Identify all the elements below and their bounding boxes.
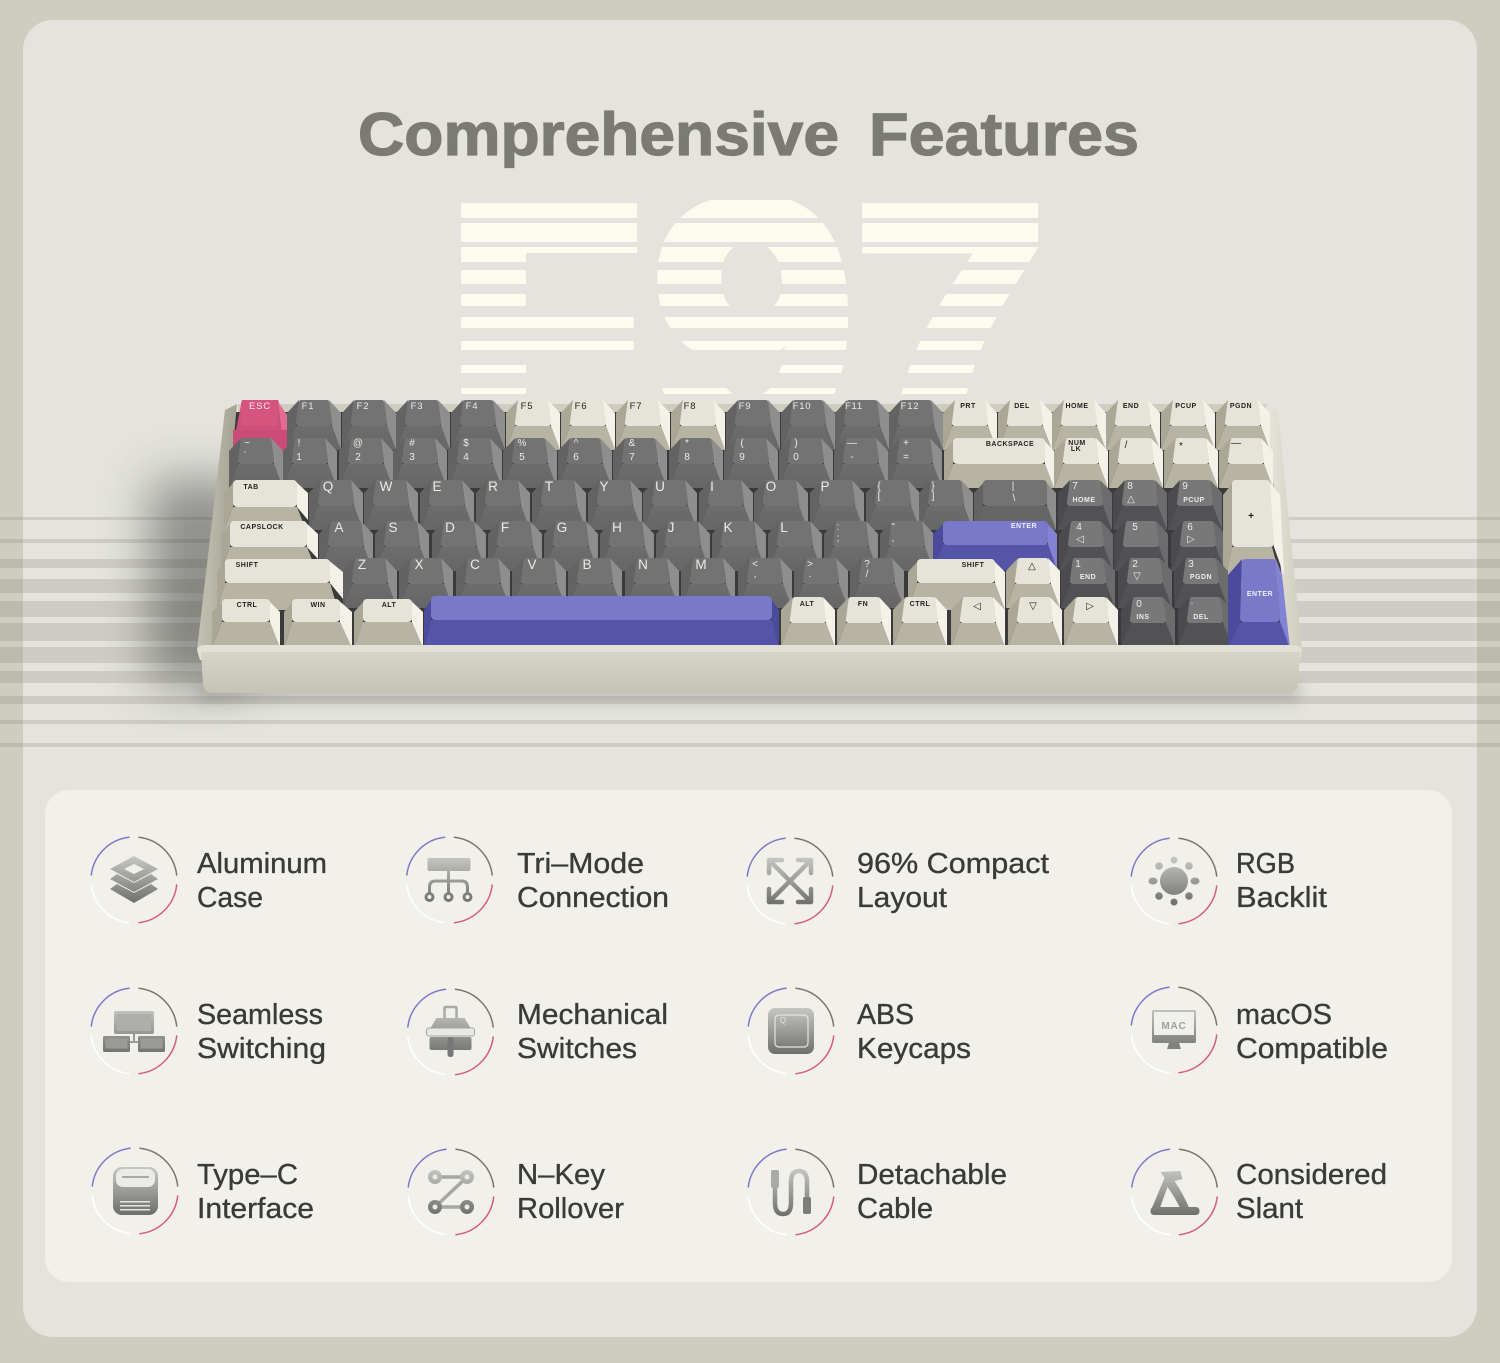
key row: function keys: F7	[630, 401, 642, 412]
icon: MAC monitor	[1152, 1010, 1196, 1049]
key row: QWERTY: 7	[1072, 481, 1078, 492]
key row: numbers: 1	[296, 452, 302, 463]
key row: QWERTY: PCUP	[1183, 497, 1205, 504]
key row: QWERTY: TAB	[243, 484, 259, 491]
key row: shift row: Z	[358, 557, 366, 572]
label: Switching	[197, 1033, 326, 1065]
icon: keycap: Q	[780, 1016, 786, 1025]
key row: numbers: )	[794, 438, 798, 449]
key row: bottom row: CTRL	[910, 601, 931, 608]
striped model name F97	[461, 200, 1038, 394]
stage stripes behind keyboard	[0, 517, 1500, 747]
key row: function keys: F6	[575, 401, 587, 412]
label	[857, 848, 1049, 914]
key row: home row: ;	[837, 533, 839, 544]
key row: numbers: 4	[463, 452, 469, 463]
key row: home row: 4	[1076, 522, 1082, 533]
feature: Aluminum Case	[91, 837, 327, 923]
feature: RGB Backlit	[1131, 838, 1327, 924]
icon: keycap	[768, 1008, 814, 1054]
key row: function keys: HOME	[1066, 403, 1088, 410]
key row: shift row: △	[1028, 561, 1036, 572]
tall plus key	[1223, 480, 1284, 590]
key row: shift row	[217, 557, 1228, 610]
striped model name F97: 9	[651, 130, 855, 509]
keyboard front edge	[197, 645, 1302, 693]
key row: home row: H	[612, 520, 622, 535]
key row: shift row: ,	[754, 569, 756, 580]
key row: QWERTY: 9	[1182, 481, 1188, 492]
label	[1236, 999, 1388, 1065]
key row: QWERTY: Q	[323, 479, 333, 494]
key row: bottom row: DEL	[1193, 614, 1209, 621]
feature: Considered Slant	[1132, 1149, 1387, 1235]
key row: function keys: DEL	[1014, 403, 1030, 410]
label: macOS	[1236, 999, 1332, 1031]
title: Features	[869, 101, 1139, 168]
key row: QWERTY	[224, 479, 1222, 530]
label: Detachable	[857, 1159, 1007, 1191]
key row: numbers: LK	[1071, 446, 1081, 453]
key row: bottom row: ▷	[1086, 601, 1094, 612]
key row: QWERTY: ]	[932, 491, 935, 502]
key row: function keys	[233, 400, 1270, 455]
key row: function keys: PCUP	[1175, 403, 1197, 410]
key row: numbers	[229, 438, 1273, 488]
key row: bottom row: .	[1191, 596, 1193, 607]
key row: shift row: END	[1080, 574, 1096, 581]
key row: bottom row: ALT	[382, 602, 397, 609]
label	[517, 1159, 624, 1225]
label	[197, 1159, 314, 1225]
key row: numbers: NUM	[1068, 440, 1086, 447]
key row: numbers: %	[518, 438, 527, 449]
icon: layers	[110, 856, 158, 903]
label: Seamless	[197, 999, 323, 1031]
label	[1236, 848, 1327, 914]
key row: QWERTY: △	[1127, 494, 1135, 505]
key row: function keys: PRT	[960, 403, 976, 410]
title	[358, 101, 1139, 168]
icon: nodes	[428, 1170, 474, 1214]
key row: shift row: ▽	[1133, 571, 1141, 582]
key row: function keys: F11	[845, 401, 863, 412]
icon: expand arrows	[769, 860, 811, 902]
key row: bottom row: INS	[1136, 614, 1150, 621]
key row: home row: K	[723, 520, 733, 535]
key row: shift row: 3	[1188, 559, 1194, 570]
key row: numbers: 8	[684, 452, 690, 463]
key row: function keys: END	[1123, 403, 1139, 410]
key row: numbers: 3	[409, 452, 415, 463]
key row: numbers: 5	[519, 452, 525, 463]
key row: shift row: PGDN	[1190, 574, 1212, 581]
label: Aluminum	[197, 848, 327, 880]
key row: home row: D	[445, 520, 455, 535]
feature: Detachable Cable	[748, 1149, 1007, 1235]
label: N–Key	[517, 1159, 606, 1191]
key row: QWERTY: O	[766, 479, 776, 494]
striped model name F97: F	[456, 135, 643, 516]
key row: function keys: PGDN	[1230, 403, 1252, 410]
key row: function keys: F1	[302, 401, 314, 412]
label: Keycaps	[857, 1033, 971, 1065]
key row: bottom row	[212, 559, 1290, 648]
label	[197, 999, 326, 1065]
key row: shift row: /	[866, 569, 869, 580]
key row: numbers: +	[903, 438, 909, 449]
key row: shift row: <	[752, 559, 758, 570]
key row: numbers: $	[463, 438, 469, 449]
key row: shift row: N	[638, 557, 648, 572]
key row: shift row: C	[470, 557, 480, 572]
key row: function keys: F10	[793, 401, 811, 412]
key row: numbers: -	[850, 452, 854, 463]
key row: home row: ◁	[1076, 534, 1084, 545]
feature: 96% Compact Layout	[747, 838, 1049, 924]
key row: shift row: .	[809, 569, 811, 580]
icon: switch	[426, 1007, 474, 1057]
key row: bottom row: ◁	[973, 601, 981, 612]
key row: bottom row: FN	[858, 601, 868, 608]
key row: home row: ,	[892, 533, 894, 544]
key row: function keys: F8	[684, 401, 696, 412]
label	[197, 848, 327, 914]
icon: sun	[1148, 856, 1200, 906]
key row: home row: "	[891, 522, 895, 533]
feature: Mechanical Switches	[408, 989, 668, 1075]
key row: function keys: F5	[521, 401, 533, 412]
key row: function keys: F3	[411, 401, 423, 412]
label: ABS	[857, 999, 914, 1031]
key row: numbers: &	[629, 438, 636, 449]
key row: shift row: 1	[1075, 559, 1081, 570]
key row: QWERTY: W	[380, 479, 393, 494]
label: Cable	[857, 1193, 933, 1225]
label: Tri–Mode	[517, 848, 644, 880]
key row: numbers: BACKSPACE	[986, 441, 1034, 448]
key row: shift row: V	[527, 557, 537, 572]
feature: Seamless Switching	[91, 988, 326, 1074]
key row: shift row: SHIFT	[236, 562, 259, 569]
key row: numbers: !	[298, 438, 300, 449]
striped model name F97: 7	[858, 136, 1047, 516]
key row: QWERTY: P	[820, 479, 830, 494]
label: Considered	[1236, 1159, 1387, 1191]
label: Rollover	[517, 1193, 624, 1225]
key row: shift row: ?	[864, 559, 870, 570]
label	[857, 1159, 1007, 1225]
key row: numbers: =	[903, 452, 909, 463]
key row: home row: CAPSLOCK	[240, 524, 284, 531]
tall plus key: +	[1248, 511, 1254, 522]
key row: QWERTY: Y	[599, 479, 609, 494]
key row: shift row: B	[582, 557, 592, 572]
key row: bottom row: CTRL	[237, 602, 258, 609]
label	[517, 999, 668, 1065]
key row: bottom row: ▽	[1029, 601, 1037, 612]
key row: bottom row: 0	[1136, 599, 1142, 610]
label	[857, 999, 971, 1065]
key row: numbers: 9	[739, 452, 745, 463]
label: Connection	[517, 882, 669, 914]
key row: shift row: 2	[1132, 559, 1138, 570]
label: Type–C	[197, 1159, 298, 1191]
label: Slant	[1236, 1193, 1303, 1225]
key row: home row: A	[334, 520, 344, 535]
key row: numbers: —	[847, 438, 857, 449]
keyboard	[197, 400, 1302, 693]
key row: QWERTY: [	[878, 491, 881, 502]
keyboard shadow	[150, 480, 1300, 700]
icon: tree	[426, 858, 471, 900]
label	[517, 848, 669, 914]
icon: connected laptops	[103, 1011, 165, 1052]
key row: home row: :	[837, 522, 839, 533]
key row: shift row: SHIFT	[962, 562, 985, 569]
key row: home row: S	[388, 520, 398, 535]
icon: slant stand	[1150, 1171, 1200, 1215]
key row: numbers: —	[1231, 438, 1241, 449]
key row: QWERTY: {	[877, 481, 881, 492]
key row: home row: 5	[1132, 522, 1138, 533]
key row: home row: L	[780, 520, 788, 535]
key row: home row: J	[668, 520, 674, 535]
key row: numbers: 7	[629, 452, 635, 463]
label: Mechanical	[517, 999, 668, 1031]
key row: numbers: `	[243, 450, 247, 462]
key row: home row: ENTER	[1011, 523, 1037, 530]
key row: QWERTY: I	[710, 479, 714, 494]
key row: bottom row: ENTER	[1247, 591, 1273, 598]
key row: numbers: *	[1179, 441, 1183, 452]
key row: QWERTY: \	[1013, 493, 1016, 504]
panel: features	[45, 790, 1452, 1282]
key row: QWERTY: 8	[1127, 481, 1133, 492]
key row: numbers: #	[409, 438, 415, 449]
key row: numbers: @	[353, 438, 363, 449]
key row: numbers: /	[1125, 440, 1128, 451]
icon: port	[113, 1167, 158, 1215]
key row: bottom row: ALT	[800, 601, 815, 608]
key row: QWERTY: }	[931, 481, 935, 492]
label: Switches	[517, 1033, 637, 1065]
icon: cable	[771, 1170, 811, 1214]
icon: MAC monitor: MAC	[1161, 1021, 1187, 1032]
label: Case	[197, 882, 263, 914]
key row: numbers: 0	[793, 452, 799, 463]
feature: Tri-Mode Connection	[407, 837, 669, 923]
key row: home row: G	[557, 520, 567, 535]
label: Layout	[857, 882, 947, 914]
key row: bottom row: WIN	[310, 602, 326, 609]
key row: numbers: ^	[574, 438, 579, 449]
key row: QWERTY: T	[545, 479, 553, 494]
key row: numbers: 6	[573, 452, 579, 463]
key row: function keys: F2	[357, 401, 369, 412]
key row: shift row: >	[807, 559, 813, 570]
striped model name F97: F	[446, 135, 633, 516]
key row: shift row: M	[695, 557, 707, 572]
key row: home row: 6	[1187, 522, 1193, 533]
key row: function keys: F4	[466, 401, 478, 412]
key row: function keys: F12	[901, 401, 919, 412]
label: Backlit	[1236, 882, 1327, 914]
feature: ABS Keycaps	[748, 988, 971, 1074]
key row: numbers: ~	[244, 438, 250, 449]
key row: home row	[221, 520, 1225, 571]
label: Compatible	[1236, 1033, 1388, 1065]
key row: numbers: 2	[355, 452, 361, 463]
key row: function keys: F9	[739, 401, 751, 412]
label: 96% Compact	[857, 848, 1049, 880]
label: Interface	[197, 1193, 314, 1225]
key row: home row: ▷	[1187, 534, 1195, 545]
key row: home row: F	[501, 520, 509, 535]
keyboard case	[197, 404, 1302, 650]
key row: numbers: (	[740, 438, 744, 449]
title: Comprehensive	[358, 101, 839, 168]
feature: N-Key Rollover	[408, 1149, 624, 1235]
feature: Type-C Interface	[92, 1148, 314, 1234]
key row: QWERTY: |	[1012, 481, 1014, 492]
key row: QWERTY: HOME	[1072, 497, 1096, 504]
feature: macOS Compatible	[1131, 987, 1388, 1073]
key row: numbers: *	[685, 438, 689, 449]
label	[1236, 1159, 1387, 1225]
key row: shift row: X	[414, 557, 424, 572]
label: RGB	[1236, 848, 1295, 880]
key row: QWERTY: E	[432, 479, 442, 494]
striped model name F97: 7	[854, 136, 1043, 516]
key row: QWERTY: R	[488, 479, 498, 494]
key row: function keys: ESC	[249, 401, 271, 412]
key row: QWERTY: U	[655, 479, 665, 494]
